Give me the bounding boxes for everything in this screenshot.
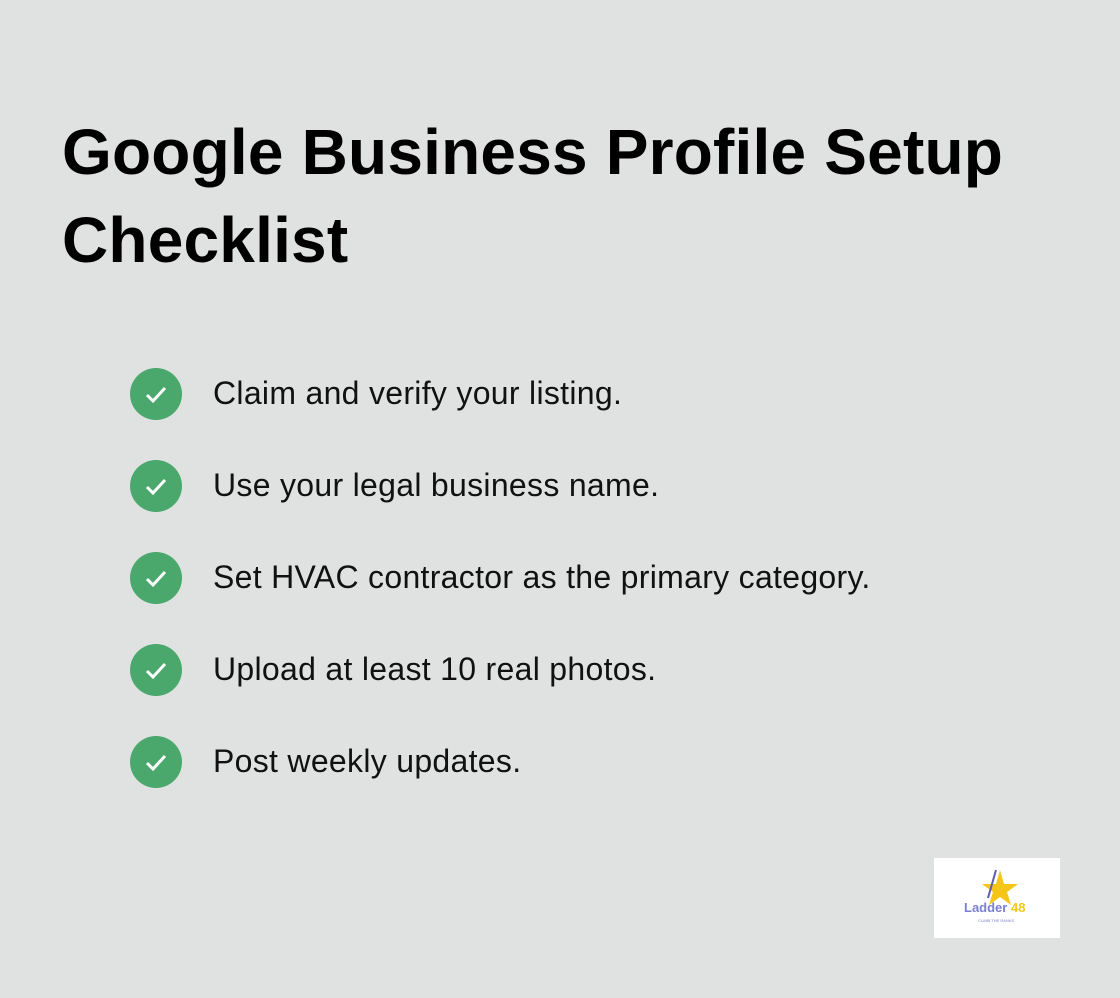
title: Checklist — [62, 204, 348, 276]
item 4: Upload at least 10 real photos. — [213, 651, 656, 687]
icon: check — [130, 368, 182, 420]
item 2: Use your legal business name. — [213, 467, 659, 503]
item 3: Set HVAC contractor as the primary category. — [213, 559, 871, 595]
item 5 — [130, 736, 521, 788]
item 1 — [130, 368, 622, 420]
icon: check — [130, 736, 182, 788]
title: Google Business Profile Setup — [62, 116, 1003, 188]
logo: CLIMB THE RANKS — [978, 918, 1014, 923]
logo — [934, 858, 1060, 938]
icon: check — [130, 644, 182, 696]
title — [62, 116, 1003, 276]
item 3 — [130, 552, 871, 604]
item 4 — [130, 644, 656, 696]
icon: check — [130, 460, 182, 512]
item 2 — [130, 460, 659, 512]
icon: check — [130, 552, 182, 604]
logo: Ladder 48 — [964, 900, 1025, 915]
item 1: Claim and verify your listing. — [213, 375, 622, 411]
item 5: Post weekly updates. — [213, 743, 521, 779]
